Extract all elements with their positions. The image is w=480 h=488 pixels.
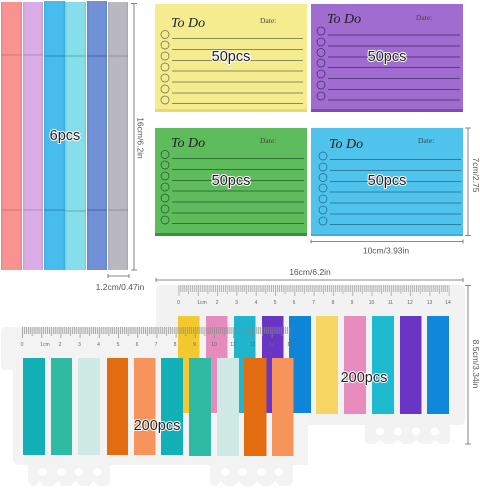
ruler: front: 4: [97, 342, 100, 348]
date: blue note: Date:: [418, 136, 434, 145]
title: green note: To Do: [171, 136, 205, 151]
pens group: [1, 1, 128, 270]
note: yellow: [155, 4, 307, 112]
title: purple note: To Do: [327, 12, 361, 27]
ruler: front: 10: [211, 342, 217, 348]
quantity: 50pcs: [368, 173, 406, 189]
ruler: back: 6: [293, 300, 296, 306]
back sheet with tabs: [156, 285, 465, 444]
pen: lilac: [23, 2, 43, 270]
ruler: back: [177, 285, 451, 306]
ruler: back: 4: [255, 300, 258, 306]
ruler: back: 14: [445, 300, 451, 306]
ruler: back: 3: [235, 300, 238, 306]
ruler: front: 14: [287, 342, 293, 348]
dimension: note height: [465, 128, 480, 236]
ruler: front: 1cm: [40, 342, 50, 348]
pen: coral: [1, 2, 22, 270]
ruler: front: 2: [59, 342, 62, 348]
quantity: 50pcs: [368, 49, 406, 65]
dimension: pen length: [131, 4, 146, 270]
quantity: 200pcs: [341, 370, 387, 386]
dimension: pen width: 1.2cm/0.47in: [96, 282, 145, 292]
ruler: back: 13: [427, 300, 432, 306]
front flag set: [21, 327, 294, 456]
date: yellow note: Date:: [260, 16, 276, 25]
ruler: back: 12: [407, 300, 413, 306]
checklist: purple note: [317, 27, 460, 100]
pen: aqua: [65, 2, 86, 270]
sticky flags: front: [23, 358, 294, 456]
ruler: back: 11: [388, 300, 393, 306]
pen: grey: [108, 2, 128, 270]
ruler: front: 0: [21, 342, 24, 348]
ruler: front: 3: [78, 342, 81, 348]
date: purple note: Date:: [416, 13, 432, 22]
ruler: back: 7: [312, 300, 315, 306]
ruler: back: 1cm: [197, 300, 207, 306]
ruler: front: 13: [269, 342, 274, 348]
checklist: green note: [161, 150, 304, 224]
ruler: front: 9: [193, 342, 196, 348]
pen: periwinkle: [87, 1, 107, 270]
dimension: note width: 10cm/3.93in: [363, 246, 409, 256]
dimension: flag sheet width: [156, 267, 463, 282]
ruler: front: 11: [230, 342, 236, 348]
checklist: yellow note: [161, 30, 303, 104]
note: purple: [311, 4, 463, 112]
title: blue note: To Do: [329, 137, 363, 152]
date: green note: Date:: [260, 136, 276, 145]
note: green: [155, 128, 307, 236]
ruler: front: 5: [117, 342, 120, 348]
pen: sky blue: [44, 1, 65, 270]
back flag set: [177, 285, 451, 414]
ruler: back: 5: [274, 300, 277, 306]
ruler: back: 8: [332, 300, 335, 306]
ruler: front: 12: [250, 342, 255, 348]
checklist: blue note: [319, 152, 461, 225]
ruler: back: 10: [369, 300, 374, 306]
sticky flags: back: [178, 316, 449, 414]
note: blue: [311, 128, 463, 236]
pen count label: 6pcs: [50, 128, 80, 144]
ruler: front: 8: [174, 342, 177, 348]
ruler: front: [21, 327, 293, 348]
dimension: flag sheet width: 16cm/6.2in: [289, 267, 331, 277]
dimension: pen width: [96, 274, 145, 292]
dimension: flag sheet height: [465, 286, 480, 444]
ruler: back: 2: [216, 300, 219, 306]
ruler: back: 0: [177, 300, 180, 306]
ruler: front: 6: [136, 342, 139, 348]
quantity: 50pcs: [212, 173, 250, 189]
dimension: note width: [311, 240, 463, 256]
dimension: pen length: 16cm/6.2in: [136, 117, 146, 159]
quantity: 200pcs: [134, 418, 180, 434]
quantity: 50pcs: [212, 49, 250, 65]
ruler: front: 7: [155, 342, 158, 348]
front sheet with tabs: [1, 327, 308, 486]
title: yellow note: To Do: [171, 16, 205, 31]
ruler: back: 9: [351, 300, 354, 306]
